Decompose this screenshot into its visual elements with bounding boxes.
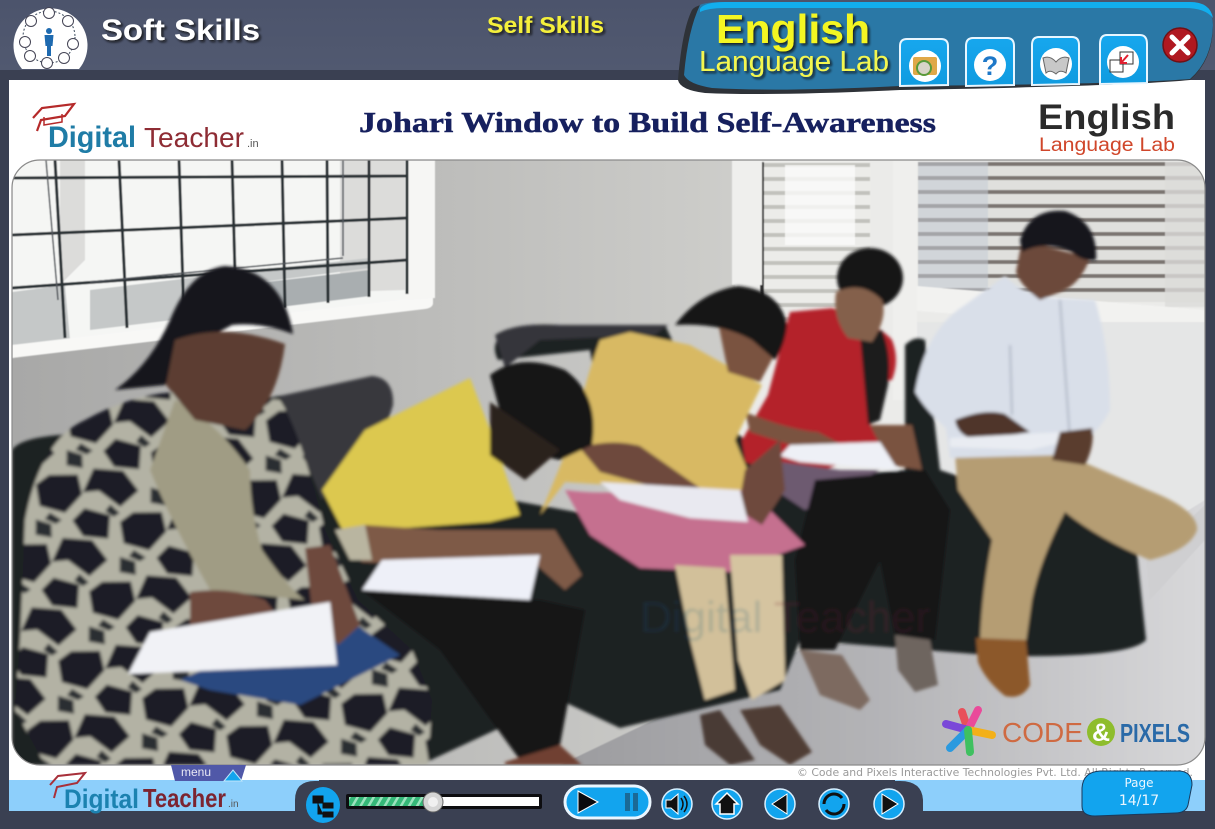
logo: English Language Lab: English <box>1038 98 1175 137</box>
logo: Digital Teacher: Teacher <box>144 122 244 153</box>
button: help <box>966 38 1014 86</box>
button: resize <box>1100 35 1147 84</box>
logo: English Language Lab: Language Lab <box>1039 135 1175 156</box>
button: help: ? <box>982 51 998 81</box>
title: Soft Skills: Soft Skills <box>101 14 260 47</box>
button: next <box>874 789 904 819</box>
floor <box>560 500 1205 765</box>
sofa <box>12 325 1146 765</box>
logo: Digital Teacher footer: Teacher <box>143 783 226 813</box>
heading: Self Skills: Self Skills <box>487 12 604 38</box>
button: book <box>1032 37 1079 85</box>
logo: Digital Teacher <box>33 104 259 154</box>
video photo: participants writing on a sofa <box>11 159 1206 766</box>
woman left <box>15 392 432 765</box>
woman pink <box>540 332 762 515</box>
woman red <box>742 308 896 480</box>
heading: Language Lab: Language Lab <box>699 46 889 78</box>
door <box>735 160 1205 560</box>
button: previous <box>765 789 795 819</box>
button: volume <box>662 789 692 819</box>
page counter: Page <box>1124 776 1154 790</box>
code & pixels logo: PIXELS <box>1120 718 1190 748</box>
button: outline tree <box>306 787 340 823</box>
copyright: © Code and Pixels Interactive Technologies Pvt. Ltd. All Rights Reserved. <box>797 766 1193 779</box>
panel: English Language Lab toolbar <box>678 2 1213 94</box>
heading: English: English <box>716 6 870 52</box>
logo: Digital Teacher footer: Digital <box>64 784 139 814</box>
logo: Digital Teacher: .in <box>247 138 259 150</box>
heading: Johari Window to Build Self-Awareness: Johari Window to Build Self-Awareness <box>359 107 936 139</box>
code & pixels logo: CODE <box>1002 717 1083 748</box>
icon: soft skills circle <box>13 8 87 69</box>
tab: menu: menu <box>181 765 211 779</box>
window left <box>12 160 408 339</box>
button: replay <box>819 789 849 819</box>
play pause buttons <box>565 786 650 818</box>
page counter: 14/17 <box>1119 793 1159 809</box>
button: close <box>1163 28 1197 62</box>
button: home <box>712 789 742 819</box>
progress bar <box>346 792 542 812</box>
logo: English Language Lab <box>1038 98 1175 156</box>
panel: player controls <box>295 781 923 829</box>
code & pixels logo <box>946 710 1190 752</box>
logo: Digital Teacher footer: .in <box>228 799 239 810</box>
logo: Digital Teacher: Digital <box>48 121 136 154</box>
man <box>955 452 1197 642</box>
tab: menu <box>171 765 246 781</box>
woman yellow <box>322 378 520 535</box>
logo: Digital Teacher footer <box>50 773 239 814</box>
button: timer folder <box>900 39 948 86</box>
page counter <box>1082 771 1192 816</box>
watermark: Digital Teacher <box>640 593 930 642</box>
code & pixels logo: & <box>1092 719 1110 747</box>
